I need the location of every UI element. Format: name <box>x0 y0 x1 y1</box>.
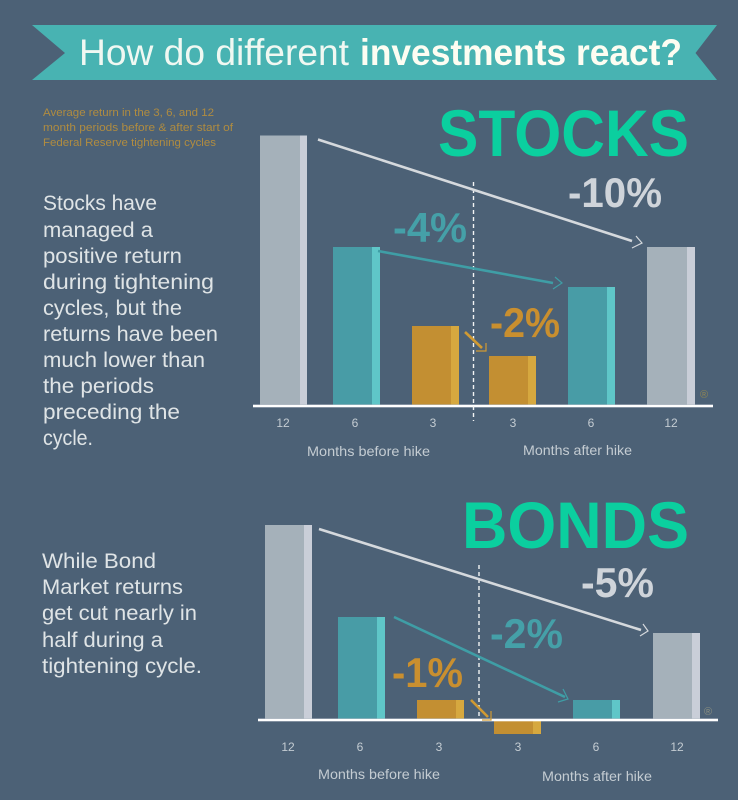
bars: bonds <box>265 525 700 734</box>
axis labels: stocks: 12 <box>276 416 290 430</box>
axis labels: bonds: 6 <box>357 740 364 754</box>
axis labels: bonds: 3 <box>436 740 443 754</box>
value: -4%: -4% <box>393 204 467 251</box>
axis labels: stocks: 12 <box>664 416 678 430</box>
axis labels: bonds: 3 <box>515 740 522 754</box>
text block: bonds description: While Bond <box>42 550 156 573</box>
value: -2%: -2% <box>490 610 563 657</box>
text block: stocks description: much lower than <box>43 349 205 372</box>
note: methodology: Federal Reserve tightening cycles <box>43 137 217 149</box>
text block: stocks description: the periods <box>43 375 154 398</box>
text block: bonds description: Market returns <box>42 576 183 599</box>
text block: stocks description: cycles, but the <box>43 297 182 320</box>
axis labels: stocks: 3 <box>430 416 437 430</box>
axis labels: bonds <box>281 740 684 784</box>
note: methodology: month periods before & after start of <box>43 122 234 134</box>
bar chart: bonds <box>258 525 718 784</box>
axis labels: stocks: Months after hike <box>523 442 632 458</box>
axis labels: bonds: 12 <box>281 740 295 754</box>
text block: stocks description: preceding the <box>43 401 180 424</box>
axis labels: stocks <box>276 416 678 459</box>
heading: bonds: BONDS <box>462 488 689 562</box>
heading: stocks: STOCKS <box>438 96 689 170</box>
value: -1%: -1% <box>392 649 463 696</box>
axis labels: stocks: 6 <box>588 416 595 430</box>
text block: stocks description <box>43 192 218 450</box>
arrow: stocks 6 month <box>378 251 562 289</box>
arrow: bonds 12 month <box>319 529 648 636</box>
bar chart: stocks <box>253 136 713 459</box>
icon: registered mark: ® <box>704 706 712 718</box>
axis labels: stocks: 3 <box>510 416 517 430</box>
text block: stocks description: during tightening <box>43 271 214 294</box>
value: -5%: -5% <box>581 559 654 606</box>
arrow: stocks 12 month <box>318 140 642 248</box>
text block: stocks description: positive return <box>43 245 182 268</box>
text block: stocks description: managed a <box>43 219 153 242</box>
title banner: How do different <box>79 32 350 73</box>
text block: bonds description: get cut nearly in <box>42 602 197 625</box>
note: methodology <box>43 107 234 149</box>
value: -10%: -10% <box>568 169 662 216</box>
arrow: bonds 3 month <box>471 700 491 720</box>
axis labels: bonds: 12 <box>670 740 684 754</box>
arrow: bonds 6 month <box>394 617 568 702</box>
value: -2%: -2% <box>490 299 560 346</box>
bars: stocks <box>260 136 695 404</box>
icon: registered mark: ® <box>700 389 708 401</box>
title banner: investments react? <box>360 32 682 73</box>
axis labels: stocks: Months before hike <box>307 443 430 459</box>
text block: stocks description: returns have been <box>43 323 218 346</box>
axis labels: stocks: 6 <box>352 416 359 430</box>
text block: bonds description <box>42 550 202 678</box>
title banner <box>32 25 717 80</box>
text block: stocks description: Stocks have <box>43 192 157 215</box>
axis labels: bonds: 6 <box>593 740 600 754</box>
text block: stocks description: cycle. <box>43 427 93 450</box>
text block: bonds description: tightening cycle. <box>42 655 202 678</box>
axis labels: bonds: Months after hike <box>542 768 652 784</box>
text block: bonds description: half during a <box>42 629 163 652</box>
note: methodology: Average return in the 3, 6, and 12 <box>43 107 214 119</box>
arrow: stocks 3 month <box>465 332 486 351</box>
axis labels: bonds: Months before hike <box>318 766 440 782</box>
